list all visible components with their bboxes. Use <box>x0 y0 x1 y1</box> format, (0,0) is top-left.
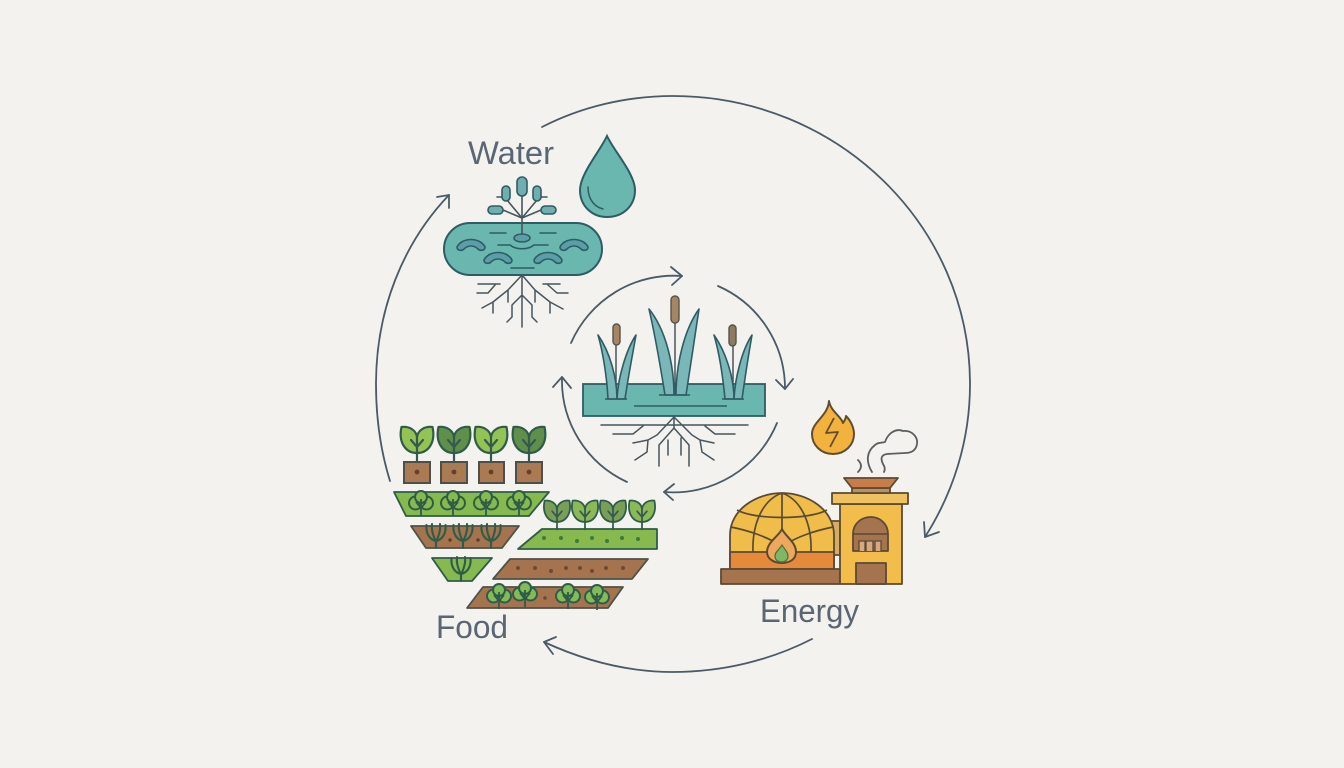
panel: water <box>444 135 635 327</box>
icon: pond roots <box>477 275 568 327</box>
icon: pond <box>444 223 602 275</box>
icon: soil bed with clovers <box>467 582 623 610</box>
icon: wetland roots <box>601 417 748 466</box>
icon: left reed <box>598 324 636 399</box>
icon: aquatic plant <box>488 177 556 234</box>
heading: Energy: Energy <box>760 593 859 629</box>
inner arrow: left <box>553 377 627 482</box>
arrow: energy to food <box>544 637 812 672</box>
icon: seeded soil bed <box>493 559 648 579</box>
icon: garden bed left tier 1 <box>394 491 549 516</box>
icon: steam cloud <box>858 430 917 472</box>
panel: food <box>394 427 657 645</box>
heading: Water: Water <box>468 135 554 171</box>
icon: garden bed left tier 3 <box>432 557 492 581</box>
panel: central wetland <box>583 296 765 466</box>
icon: right reed <box>714 325 752 399</box>
icon: wetland water <box>583 384 765 416</box>
inner arrow: right <box>718 286 793 389</box>
inner arrow: top <box>571 267 682 343</box>
icon: garden bed left tier 2 <box>411 524 519 548</box>
icon: flame with lightning bolt <box>812 401 854 454</box>
arrow: food to water <box>376 195 449 481</box>
arrow: water to energy <box>542 96 970 537</box>
heading: Food: Food <box>436 609 508 645</box>
icon: potted seedlings <box>401 427 545 483</box>
panel: energy <box>721 401 917 629</box>
icon: centre reed <box>649 296 699 395</box>
icon: green bed with sprouts <box>518 501 657 549</box>
icon: biogas dome <box>721 493 840 584</box>
icon: furnace tower <box>832 478 908 584</box>
inner arrow: bottom <box>664 423 777 500</box>
icon: water drop <box>580 136 635 217</box>
